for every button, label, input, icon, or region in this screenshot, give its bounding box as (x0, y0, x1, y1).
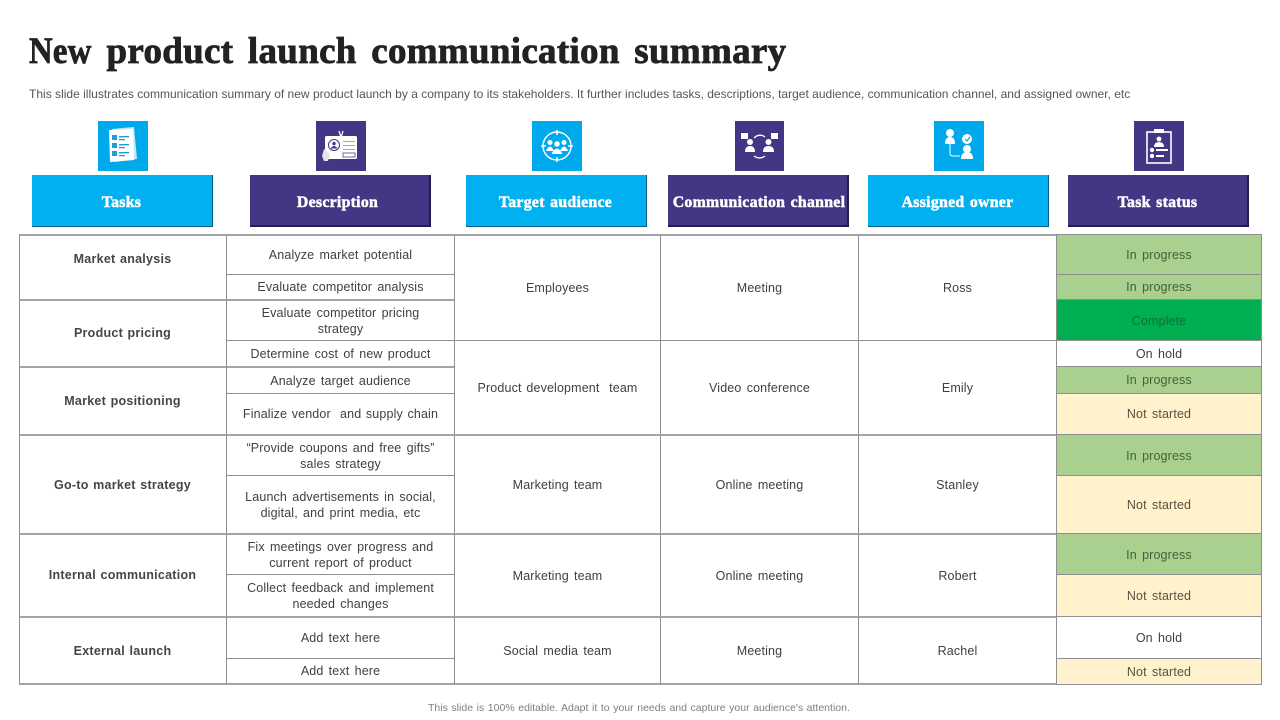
description: Evaluate competitor pricing strategy: strategy (318, 322, 363, 336)
audience: Employees (454, 234, 661, 341)
owner: Emily (858, 340, 1057, 435)
footer note: This slide is 100% editable. Adapt it to your needs and capture your audience's attention. (428, 702, 850, 714)
description: Collect feedback: needed changes (292, 596, 388, 610)
status: Not started (1056, 393, 1262, 435)
icon: tasks checklist (98, 121, 148, 171)
status: Not started: Not started (1127, 407, 1191, 421)
audience: Social media team: Social media team (503, 644, 612, 658)
channel: Online meeting 1: Online meeting (716, 478, 803, 492)
status: Not started: Not started (1127, 664, 1191, 678)
status: In progress: In progress (1126, 248, 1192, 262)
audience: Product development team: Product development team (478, 380, 637, 394)
status: In progress: In progress (1126, 280, 1192, 294)
description: Add text here 2: Add text here (301, 664, 380, 678)
description: Collect feedback: Collect feedback and implement (247, 580, 434, 594)
owner: Stanley: Stanley (936, 478, 979, 492)
channel: Meeting (660, 234, 859, 341)
description: Add text here 2 (226, 658, 455, 685)
description: Add text here 1: Add text here (301, 631, 380, 645)
icon: description ID card (316, 121, 366, 171)
status: In progress: In progress (1126, 373, 1192, 387)
status: In progress (1056, 434, 1262, 476)
status: Complete (1056, 299, 1262, 341)
description: Evaluate competitor pricing strategy: Evaluate competitor pricing (262, 306, 419, 320)
owner: Robert: Robert (938, 568, 977, 582)
header: Tasks (32, 175, 213, 227)
channel: Meeting 2: Meeting (737, 644, 782, 658)
status: Not started (1056, 475, 1262, 534)
task: Product pricing (19, 299, 227, 367)
status: On hold: On hold (1136, 630, 1182, 644)
status: Not started: Not started (1127, 588, 1191, 602)
status: On hold: On hold (1136, 346, 1182, 360)
description: Analyze target audience (226, 366, 455, 394)
header: Communication channel (668, 175, 849, 227)
icon: task status clipboard (1134, 121, 1184, 171)
task: External launch (19, 616, 227, 685)
description: Collect feedback (226, 574, 455, 617)
status: In progress: In progress (1126, 548, 1192, 562)
status: In progress (1056, 533, 1262, 575)
status: Not started (1056, 574, 1262, 617)
header: Assigned owner (868, 175, 1049, 227)
description: Fix meetings: current report of product (269, 556, 412, 570)
description: Evaluate competitor analysis (226, 274, 455, 300)
title: product launch communication summary (107, 31, 786, 72)
description: Analyze market potential: Analyze market potential (269, 248, 412, 262)
owner: Ross: Ross (943, 281, 972, 295)
status: On hold (1056, 340, 1262, 367)
status: On hold (1056, 616, 1262, 659)
task: Product pricing: Product pricing (74, 326, 171, 340)
audience: Employees: Employees (526, 281, 589, 295)
description: Evaluate competitor pricing strategy (226, 299, 455, 341)
task: Internal communication (19, 533, 227, 617)
owner: Emily: Emily (942, 380, 973, 394)
status: Not started: Not started (1127, 498, 1191, 512)
header: Target audience (466, 175, 647, 227)
status: Complete: Complete (1132, 314, 1186, 328)
description: Determine cost of new product: Determine cost of new product (250, 346, 430, 360)
description: Evaluate competitor analysis: Evaluate competitor analysis (257, 280, 424, 294)
channel: Meeting: Meeting (737, 281, 782, 295)
audience: Marketing team 1 (454, 434, 661, 534)
status: In progress: In progress (1126, 448, 1192, 462)
description: Launch advertisements (226, 475, 455, 534)
status: In progress (1056, 234, 1262, 275)
description: Determine cost of new product (226, 340, 455, 367)
audience: Social media team (454, 616, 661, 685)
description: Provide coupons and free gifts: “Provide coupons and free gifts” (246, 440, 435, 454)
description: Finalize vendor and supply chain (226, 393, 455, 435)
owner: Rachel (858, 616, 1057, 685)
description: Fix meetings: Fix meetings over progress and (248, 540, 433, 554)
description: Add text here 1 (226, 616, 455, 659)
task: Go-to market strategy: Go-to market strategy (54, 478, 191, 492)
task: Market positioning: Market positioning (64, 394, 181, 408)
table (19, 234, 1262, 685)
audience: Product development team (454, 340, 661, 435)
header: Task status: Task status (1118, 194, 1197, 210)
channel: Meeting 2 (660, 616, 859, 685)
task: Market positioning (19, 366, 227, 435)
subtitle: This slide illustrates communication summary of new product launch by a company to its stakeholders. It further includes tasks, descriptions, target audience, communication channel, and assigned owner, etc (29, 87, 1130, 101)
owner: Rachel: Rachel (938, 644, 977, 658)
channel: Online meeting 2: Online meeting (716, 568, 803, 582)
audience: Marketing team 2 (454, 533, 661, 617)
channel: Online meeting 1 (660, 434, 859, 534)
icon: target audience (532, 121, 582, 171)
task: Market analysis: Market analysis (74, 252, 171, 266)
owner: Robert (858, 533, 1057, 617)
description: Analyze market potential (226, 234, 455, 275)
description: Fix meetings (226, 533, 455, 575)
task: Go-to market strategy (19, 434, 227, 534)
header: Tasks: Tasks (102, 194, 141, 210)
icon: communication channel (735, 121, 784, 171)
task: External launch: External launch (74, 644, 171, 658)
description: Finalize vendor and supply chain: Finalize vendor and supply chain (243, 407, 438, 421)
owner: Stanley (858, 434, 1057, 534)
title: New (29, 31, 92, 72)
header: Communication channel: Communication channel (673, 194, 845, 210)
task: Market analysis (19, 234, 227, 300)
status: Not started (1056, 658, 1262, 685)
header: Description: Description (297, 194, 378, 210)
description: Provide coupons and free gifts: sales strategy (300, 456, 381, 470)
channel: Online meeting 2 (660, 533, 859, 617)
description: Analyze target audience: Analyze target audience (270, 374, 411, 388)
status: In progress (1056, 274, 1262, 300)
header: Target audience: Target audience (499, 194, 612, 210)
header: Assigned owner: Assigned owner (902, 194, 1013, 210)
status: In progress (1056, 366, 1262, 394)
icon: assigned owner (934, 121, 984, 171)
audience: Marketing team 2: Marketing team (513, 568, 602, 582)
header: Description (250, 175, 431, 227)
header: Task status (1068, 175, 1249, 227)
owner: Ross (858, 234, 1057, 341)
description: Launch advertisements: digital, and print media, etc (261, 506, 420, 520)
description: Provide coupons and free gifts (226, 434, 455, 476)
channel: Video conference (660, 340, 859, 435)
channel: Video conference: Video conference (709, 380, 810, 394)
description: Launch advertisements: Launch advertisements in social, (245, 490, 436, 504)
task: Internal communication: Internal communication (49, 568, 196, 582)
audience: Marketing team 1: Marketing team (513, 478, 602, 492)
